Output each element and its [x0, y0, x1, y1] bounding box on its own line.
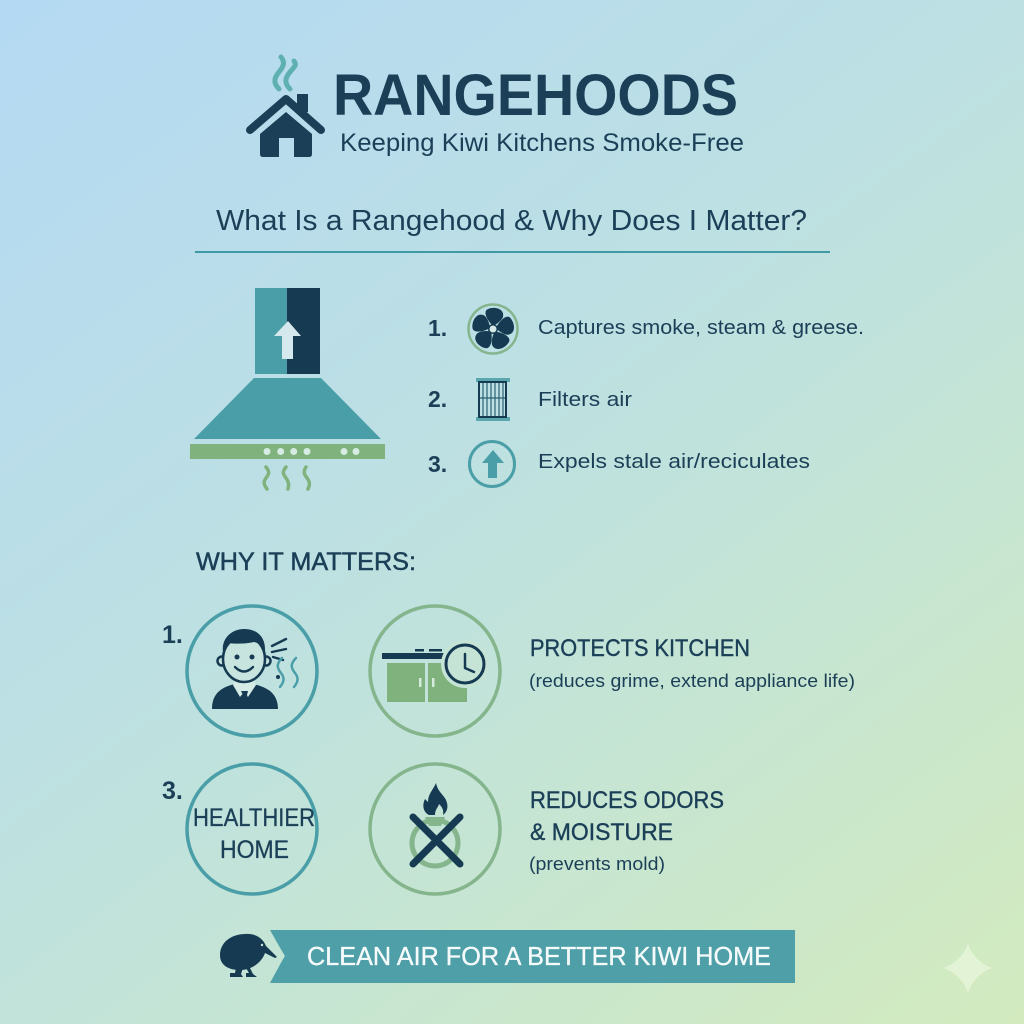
item 3: healthier home circle: 3. [162, 777, 183, 805]
item 1: person icon circle [162, 606, 317, 736]
icon: sparkle [943, 944, 992, 993]
title: RANGEHOODS [333, 63, 738, 128]
step 2 [428, 378, 632, 421]
item 2: kitchen and clock circle [370, 606, 500, 736]
item 3: healthier home circle: HEALTHIER [193, 804, 315, 832]
text: reduces odors and moisture [529, 787, 724, 874]
text: protects kitchen [529, 635, 855, 691]
text: reduces odors and moisture: (prevents mold) [529, 853, 665, 874]
text: protects kitchen: PROTECTS KITCHEN [530, 635, 750, 662]
step 1 [428, 304, 864, 354]
banner [270, 930, 795, 983]
list: how it works [428, 304, 864, 486]
icon: kiwi bird [220, 934, 277, 977]
step 3: Expels stale air/reciculates [538, 450, 810, 473]
item 3: healthier home circle [162, 764, 317, 894]
text: reduces odors and moisture: & MOISTURE [530, 819, 673, 846]
text: reduces odors and moisture: REDUCES ODORS [530, 787, 724, 814]
text: protects kitchen: (reduces grime, extend appliance life) [529, 670, 855, 691]
icon: house with smoke [250, 57, 321, 157]
heading: why it matters: WHY IT MATTERS: [196, 548, 416, 576]
illustration: rangehood [190, 288, 385, 489]
item 1: person icon circle: 1. [162, 621, 183, 649]
banner: CLEAN AIR FOR A BETTER KIWI HOME [307, 941, 771, 971]
item 3: healthier home circle: HOME [220, 836, 289, 864]
section heading: What Is a Rangehood & Why Does I Matter? [216, 205, 807, 237]
subtitle: Keeping Kiwi Kitchens Smoke-Free [340, 129, 744, 157]
item 4: flame crossed out circle [370, 764, 500, 894]
step 3: 3. [428, 451, 447, 477]
step 2: 2. [428, 386, 447, 412]
step 2: Filters air [538, 388, 632, 411]
step 3 [428, 442, 810, 486]
step 1: Captures smoke, steam & greese. [538, 316, 864, 339]
step 1: 1. [428, 315, 447, 341]
header [250, 57, 744, 157]
